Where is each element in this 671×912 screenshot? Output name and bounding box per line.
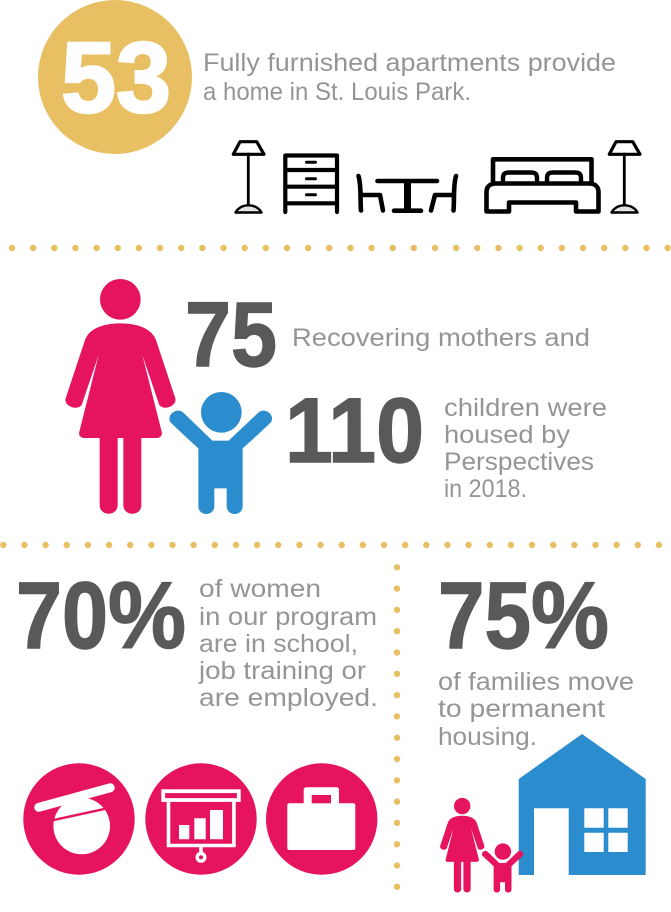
icon: mother and child: [440, 798, 523, 893]
icon: table and chairs: [358, 176, 456, 211]
panel: mothers and children housed: [65, 279, 607, 514]
icon: house: [519, 734, 646, 875]
icon: mother: [65, 279, 176, 514]
number: 110 children: 110: [285, 380, 424, 482]
gold circle with number 53: [38, 0, 192, 154]
icon: presentation screen: [145, 763, 257, 875]
text: families move: [438, 668, 634, 751]
text: women in program: are in school,: [199, 630, 358, 658]
text: furnished apartments: a home in St. Louis Park.: [203, 78, 471, 106]
text: children housed: [444, 394, 607, 503]
panel: women in school or employed: [16, 563, 378, 875]
gold circle with number 53: 53: [61, 22, 171, 134]
text: women in program: job training or: [198, 657, 366, 685]
number: 75 percent: 75: [438, 563, 531, 669]
text: recovering mothers: Recovering mothers and: [292, 324, 590, 352]
text: children housed: Perspectives: [444, 448, 594, 476]
panel: furnished apartments: [38, 0, 640, 212]
panel: families in permanent housing: [438, 563, 646, 893]
text: furnished apartments: Fully furnished apartments provide: [203, 49, 616, 77]
text: women in program: are employed.: [199, 684, 378, 712]
number: 75 mothers: 75: [185, 284, 277, 386]
icon: child: [169, 392, 272, 514]
icon: graduation cap: [23, 763, 135, 875]
text: women in program: in our program: [199, 603, 377, 631]
text: women in program: [198, 575, 378, 712]
number: 75 percent: [438, 563, 609, 669]
text: furnished apartments: [203, 49, 616, 106]
icon: bed: [486, 159, 598, 212]
icon: briefcase: [266, 763, 377, 875]
text: children housed: housed by: [444, 421, 571, 449]
number: 70 percent: 70: [16, 563, 108, 669]
number: 70 percent: %: [108, 563, 186, 669]
icon: dresser: [285, 156, 337, 212]
text: families move: housing.: [438, 723, 537, 751]
number: 70 percent: [16, 563, 186, 669]
icon: right floor lamp: [609, 142, 640, 212]
number: 75 percent: %: [531, 563, 609, 669]
text: families move: of families move: [438, 668, 634, 696]
text: children housed: in 2018.: [444, 475, 527, 503]
icon: left floor lamp: [233, 142, 264, 212]
text: women in program: of women: [199, 575, 321, 603]
text: families move: to permanent: [438, 695, 605, 723]
text: children housed: children were: [444, 394, 607, 422]
